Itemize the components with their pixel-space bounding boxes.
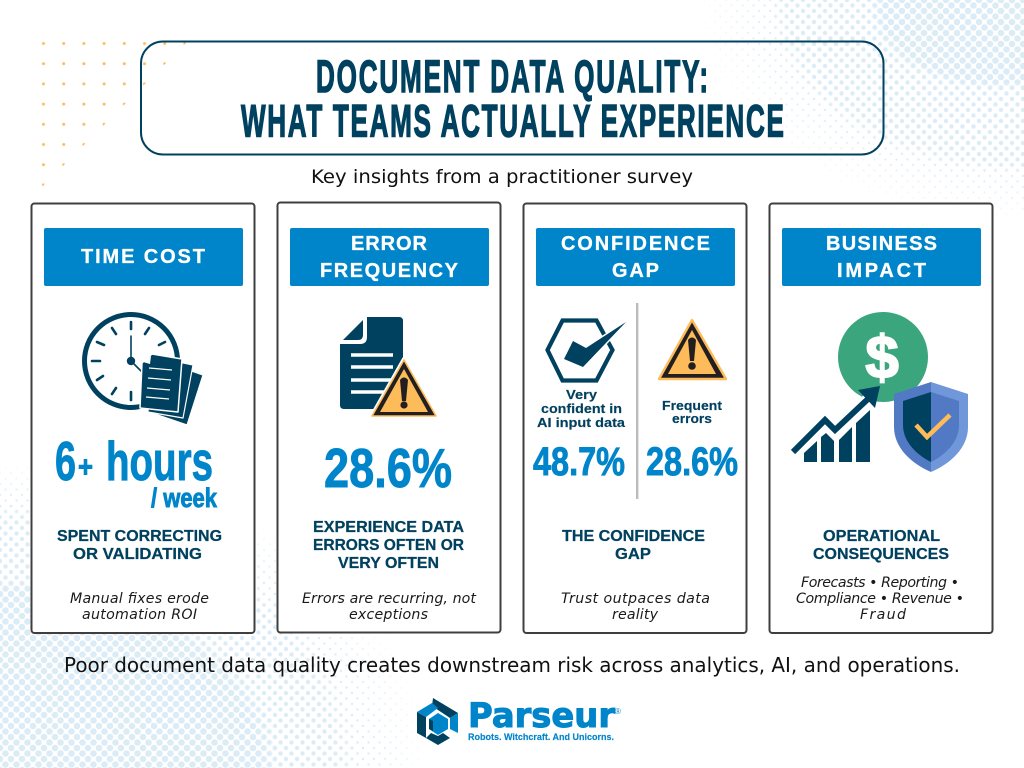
label: very confident — [537, 387, 626, 430]
note: errors recurring: exceptions — [349, 607, 429, 623]
heading: error frequency: ERROR — [351, 233, 428, 255]
heading: confidence gap: CONFIDENCE — [561, 233, 710, 255]
label: very confident: AI input data — [537, 415, 626, 430]
registered mark: ® — [615, 707, 621, 716]
label: very confident: Very — [566, 387, 598, 402]
label: operational consequences: CONSEQUENCES — [813, 546, 949, 563]
heading: time cost: TIME COST — [81, 246, 205, 268]
heading: error frequency: FREQUENCY — [320, 260, 459, 282]
label: very confident: confident in — [541, 401, 622, 416]
subtitle: Key insights from a practitioner survey — [311, 166, 693, 188]
note: errors recurring: Errors are recurring, not — [302, 591, 476, 607]
heading: time cost — [44, 228, 243, 286]
icon: hexagon check — [548, 320, 626, 380]
stat: 6+ hours — [55, 430, 218, 513]
note: manual fixes — [70, 591, 209, 623]
note: forecasts list: Forecasts • Reporting • — [801, 575, 959, 591]
title line 2: WHAT TEAMS ACTUALLY EXPERIENCE — [241, 96, 784, 146]
stat: 48.7%: 48.7% — [533, 440, 625, 484]
label: spent correcting: OR VALIDATING — [73, 546, 202, 563]
icon: growth chart — [793, 386, 880, 462]
label: the confidence gap: THE CONFIDENCE — [562, 528, 705, 545]
note: trust outpaces: Trust outpaces data — [561, 591, 710, 607]
icon: shield — [894, 382, 968, 472]
note: manual fixes: automation ROI — [82, 607, 197, 623]
title line 1: DOCUMENT DATA QUALITY: — [316, 52, 708, 102]
heading: confidence gap: GAP — [612, 260, 659, 282]
divider — [636, 303, 638, 499]
stat: 6+ hours: hours — [106, 430, 213, 492]
label: frequent errors: errors — [672, 411, 712, 426]
icon: parseur mark — [417, 698, 458, 745]
panel: business impact — [770, 204, 992, 633]
icon: dollar coin — [838, 312, 928, 402]
stat: 6+ hours: 6 — [55, 430, 76, 492]
label: experience data errors: ERRORS OFTEN OR — [313, 537, 464, 554]
label: experience data errors: VERY OFTEN — [338, 555, 439, 572]
note: trust outpaces — [561, 591, 710, 623]
label: spent correcting: SPENT CORRECTING — [57, 528, 222, 545]
halftone top right — [714, 0, 1024, 210]
panel: error frequency — [278, 202, 500, 632]
label: experience data errors: EXPERIENCE DATA — [313, 519, 464, 536]
stat: 28.6%: 28.6% — [324, 437, 452, 499]
stat: 6+ hours: / week — [151, 483, 218, 513]
stat: 28.6% frequent: 28.6% — [646, 440, 738, 484]
heading: business impact — [782, 228, 981, 286]
label: the confidence gap — [562, 528, 705, 563]
wordmark: Parseur — [468, 696, 615, 736]
label: the confidence gap: GAP — [615, 546, 651, 563]
label: frequent errors — [662, 398, 723, 426]
logo: parseur — [417, 696, 621, 745]
label: frequent errors: Frequent — [662, 398, 723, 413]
tagline: Robots. Witchcraft. And Unicorns. — [468, 732, 614, 742]
halftone bottom left — [0, 472, 414, 768]
title box — [141, 42, 884, 154]
note: forecasts list: Compliance • Revenue • — [796, 591, 964, 607]
label: operational consequences: OPERATIONAL — [823, 528, 940, 545]
icon: clock and papers — [84, 314, 203, 425]
heading: business impact: IMPACT — [837, 260, 926, 282]
note: trust outpaces: reality — [612, 607, 659, 623]
label: experience data errors — [313, 519, 464, 572]
heading: business impact: BUSINESS — [826, 233, 937, 255]
label: operational consequences — [813, 528, 949, 563]
panel: time cost — [32, 204, 254, 633]
icon: warning triangle — [659, 320, 726, 379]
note: forecasts list: Fraud — [860, 607, 907, 623]
heading: confidence gap — [536, 228, 735, 286]
note: errors recurring — [302, 591, 476, 623]
icon: dollar coin: $ — [865, 324, 899, 391]
note: manual fixes: Manual fixes erode — [70, 591, 209, 607]
note: forecasts list — [796, 575, 964, 623]
stat: 6+ hours: + — [78, 451, 93, 484]
panel: confidence gap — [524, 204, 746, 633]
orange dot triangle — [33, 33, 196, 196]
footer statement: Poor document data quality creates downstream risk across analytics, AI, and operations. — [64, 653, 960, 677]
icon: document with warning — [340, 317, 437, 417]
label: spent correcting — [57, 528, 222, 563]
heading: error frequency — [290, 228, 489, 286]
